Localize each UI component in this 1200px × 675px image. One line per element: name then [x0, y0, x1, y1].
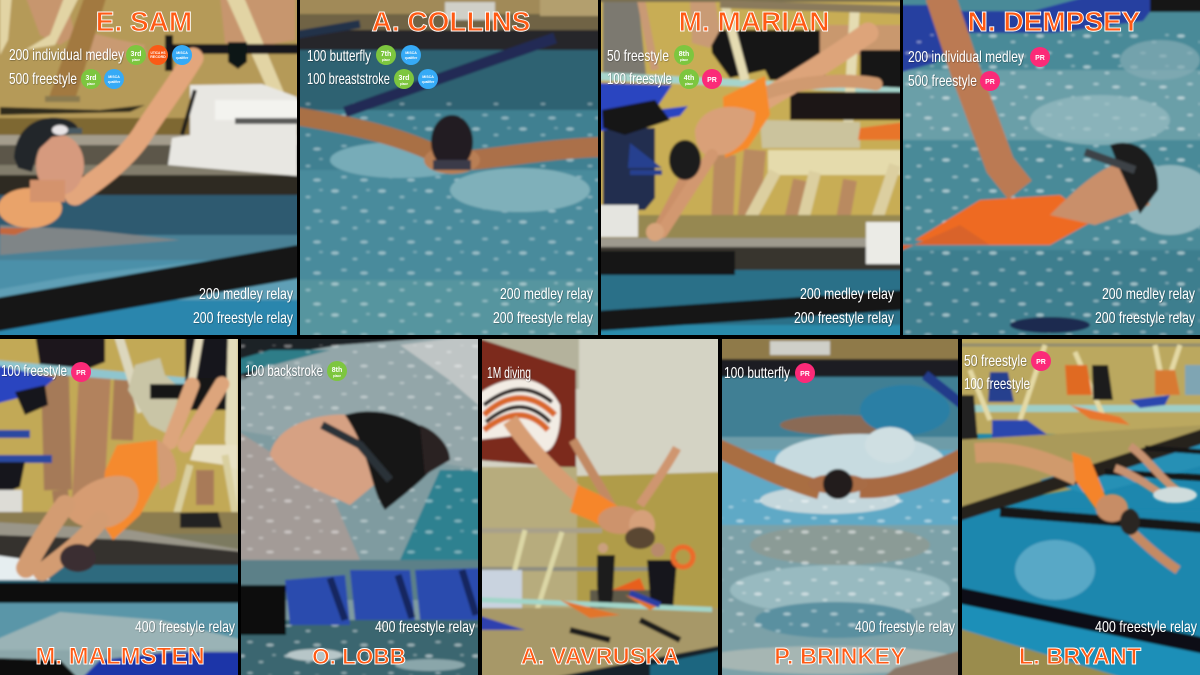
photo: backstroke swimmer [898, 0, 1200, 340]
relay: 200 medley: 200 medley relay [199, 286, 293, 303]
badge: MISCA qualifier [401, 45, 421, 65]
badge: 7th place [376, 45, 396, 65]
badge: school record [148, 45, 168, 65]
name: O. LOBB [312, 644, 406, 669]
photo: race start dive [957, 334, 1200, 675]
name: A. COLLINS [372, 6, 530, 37]
badge: 4th place: place [685, 82, 693, 86]
badge: PR: PR [1036, 359, 1046, 366]
panel: A. Vavruska [477, 334, 723, 675]
event: 200 individual medley: 200 individual medley [908, 49, 1024, 66]
badge: 3rd place [81, 69, 101, 89]
events [307, 45, 593, 327]
events [724, 363, 955, 636]
badge: 3rd place: place [132, 58, 140, 62]
photo: dive off the block [596, 0, 905, 340]
name: E. SAM [96, 6, 192, 37]
relay: 200 freestyle: 200 freestyle relay [794, 310, 894, 327]
badge: MISCA qualifier: qualifier [405, 56, 418, 60]
badge: school record: UTICA HS [151, 51, 165, 55]
events [964, 351, 1197, 636]
panel: M. Malmsten [0, 334, 243, 675]
badge: 8th place: 8th [679, 51, 689, 58]
panel: N. Dempsey [898, 0, 1200, 340]
badge: MISCA qualifier: MISCA [108, 75, 120, 79]
relay: 200 freestyle: 200 freestyle relay [193, 310, 293, 327]
badge: MISCA qualifier: qualifier [176, 56, 189, 60]
badge: MISCA qualifier [172, 45, 192, 65]
event: 100 breaststroke: 100 breaststroke [307, 71, 390, 88]
relay: 200 freestyle: 200 freestyle relay [493, 310, 593, 327]
badge: MISCA qualifier: qualifier [108, 80, 121, 84]
badge: 3rd place: place [87, 82, 95, 86]
relay: 400 freestyle: 400 freestyle relay [855, 619, 955, 636]
event: 200 individual medley: 200 individual medley [9, 47, 124, 64]
panel: P. Brinkey [722, 339, 958, 675]
events [9, 45, 293, 327]
badge: PR: PR [1035, 55, 1045, 62]
relay: 400 freestyle: 400 freestyle relay [375, 619, 475, 636]
badge: PR: PR [800, 371, 810, 378]
event: 100 butterfly: 100 butterfly [724, 365, 790, 382]
panel: M. Marian [596, 0, 905, 340]
badge: PR [71, 362, 91, 382]
badge: 8th place [327, 361, 347, 381]
badge: 3rd place [394, 69, 414, 89]
badge: PR: PR [76, 370, 86, 377]
badge: 8th place: 8th [332, 367, 342, 374]
name: M. MALMSTEN [35, 643, 205, 670]
badge: 7th place: place [382, 58, 390, 62]
events [1, 362, 235, 636]
event: 50 freestyle: 50 freestyle [607, 48, 669, 65]
badge: MISCA qualifier: MISCA [405, 51, 417, 55]
panel: A. Collins [295, 0, 603, 340]
relay: 400 freestyle: 400 freestyle relay [135, 619, 235, 636]
name: N. DEMPSEY [968, 6, 1141, 37]
photo: butterfly swimmer [295, 0, 603, 340]
badge: PR [1031, 351, 1051, 371]
badge: PR: PR [707, 77, 717, 84]
badge: MISCA qualifier [104, 69, 124, 89]
event: 100 freestyle: 100 freestyle [1, 363, 67, 380]
badge: MISCA qualifier: MISCA [422, 75, 434, 79]
event: 500 freestyle: 500 freestyle [9, 71, 77, 88]
events [908, 47, 1195, 327]
panel: L. Bryant [957, 334, 1200, 675]
badge: 3rd place: 3rd [131, 51, 141, 58]
event: 100 backstroke: 100 backstroke [245, 363, 323, 380]
badge: PR [980, 71, 1000, 91]
badge: MISCA qualifier [418, 69, 438, 89]
badge: 3rd place: 3rd [86, 75, 96, 82]
relay: 200 medley: 200 medley relay [500, 286, 593, 303]
event: 500 freestyle: 500 freestyle [908, 73, 977, 90]
name: P. BRINKEY [774, 643, 906, 669]
badge: 4th place [679, 69, 699, 89]
badge: 8th place: place [680, 58, 688, 62]
photo: butterfly swimmer [722, 339, 958, 675]
badge: 8th place [674, 45, 694, 65]
events [607, 45, 894, 327]
panel: O. Lobb [236, 334, 483, 675]
badge: 7th place: 7th [381, 51, 391, 58]
photo: backstroke swimmer [236, 334, 483, 675]
event: 100 freestyle: 100 freestyle [607, 71, 672, 88]
name: M. MARIAN [679, 6, 829, 37]
name: A. VAVRUSKA [521, 643, 679, 669]
relay: 200 medley: 200 medley relay [800, 286, 894, 303]
badge: 3rd place [126, 45, 146, 65]
badge: 4th place: 4th [684, 75, 694, 82]
badge: PR [795, 363, 815, 383]
badge: PR [702, 69, 722, 89]
badge: MISCA qualifier: qualifier [422, 80, 435, 84]
photo: dive with mascot banner [477, 334, 723, 675]
name: L. BRYANT [1019, 643, 1142, 669]
badge: 3rd place: 3rd [399, 75, 409, 82]
panel: E. Sam [0, 0, 302, 340]
badge: 8th place: place [333, 374, 341, 378]
photo: swimmer at the wall [0, 0, 302, 340]
badge: school record: RECORD [150, 55, 166, 59]
badge: MISCA qualifier: MISCA [176, 51, 188, 55]
event: 50 freestyle: 50 freestyle [964, 353, 1027, 370]
badge: PR: PR [985, 79, 995, 86]
events [245, 361, 475, 636]
photo: dive off the block [0, 334, 243, 675]
badge: PR [1030, 47, 1050, 67]
event: 100 butterfly: 100 butterfly [307, 48, 371, 65]
badge: 3rd place: place [400, 82, 408, 86]
event: 100 freestyle: 100 freestyle [964, 376, 1030, 393]
event: 1M diving: 1M diving [487, 365, 531, 382]
